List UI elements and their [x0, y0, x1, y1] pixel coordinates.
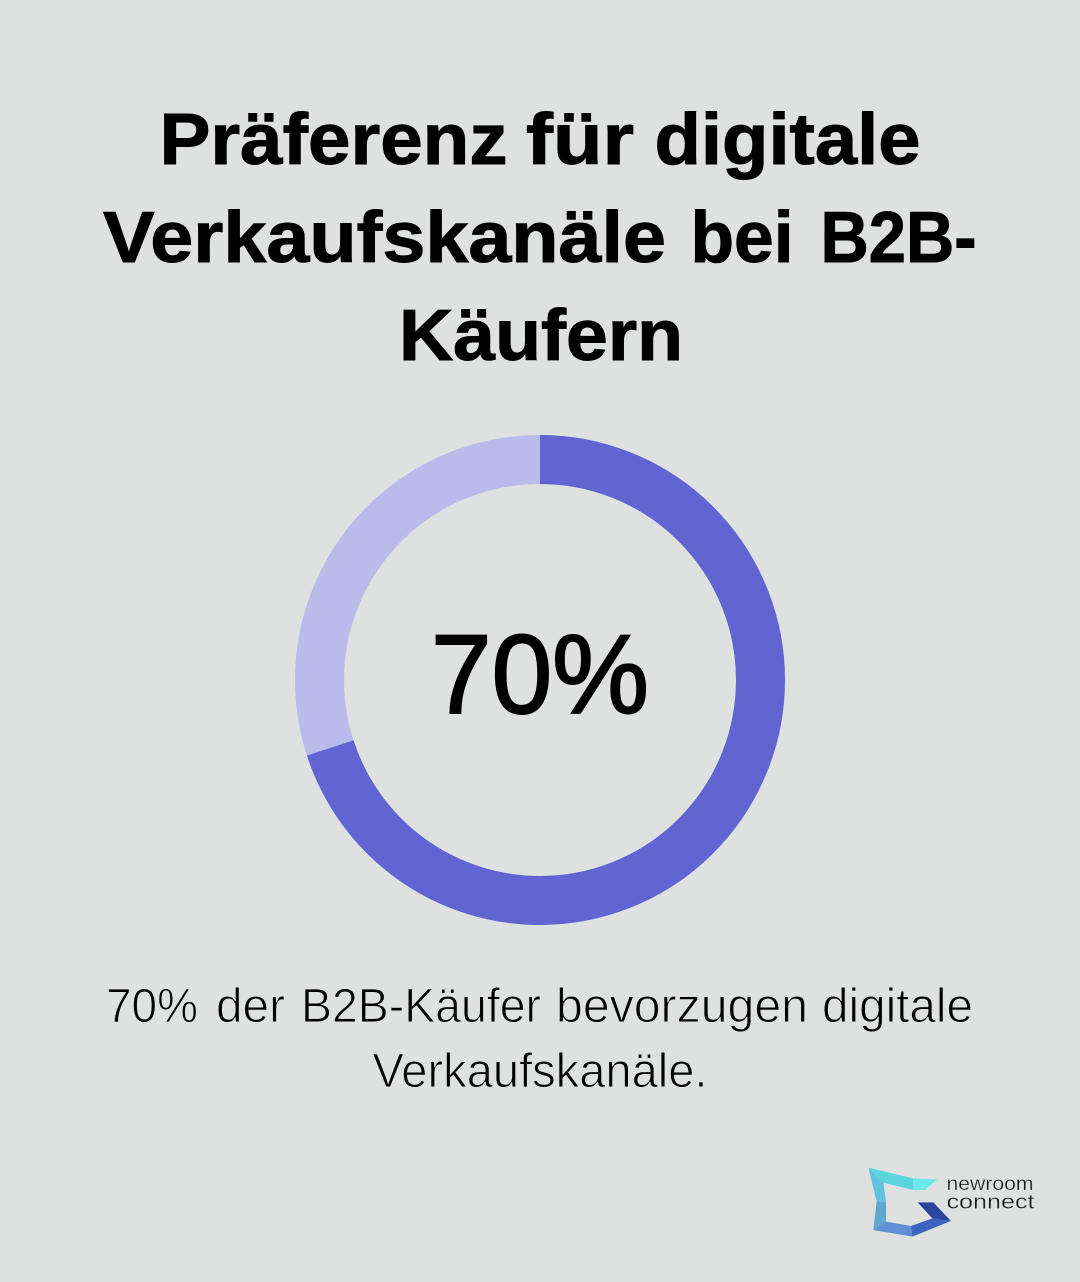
description text	[106, 980, 973, 1098]
logo wordmark	[946, 1173, 1035, 1214]
title	[103, 100, 976, 376]
title: digitale	[654, 100, 920, 180]
logo wordmark: connect	[946, 1192, 1035, 1214]
description text: bevorzugen	[556, 980, 808, 1033]
description text: der	[216, 980, 285, 1033]
title: Präferenz	[160, 100, 508, 180]
description text: digitale	[822, 980, 973, 1033]
title: Verkaufskanäle	[103, 198, 666, 278]
donut centre value: 70%	[431, 612, 649, 737]
logo mark	[868, 1168, 951, 1237]
description text: 70%	[106, 980, 198, 1033]
logo: newroom connect	[868, 1168, 1035, 1237]
title: Käufern	[399, 296, 683, 376]
title: B2B-	[820, 198, 976, 278]
logo wordmark: newroom	[946, 1173, 1034, 1195]
title: bei	[690, 198, 794, 278]
description text: B2B-Käufer	[301, 980, 541, 1033]
title: für	[526, 100, 634, 180]
donut chart: 70 percent	[320, 460, 760, 900]
description text: Verkaufskanäle.	[372, 1045, 708, 1098]
